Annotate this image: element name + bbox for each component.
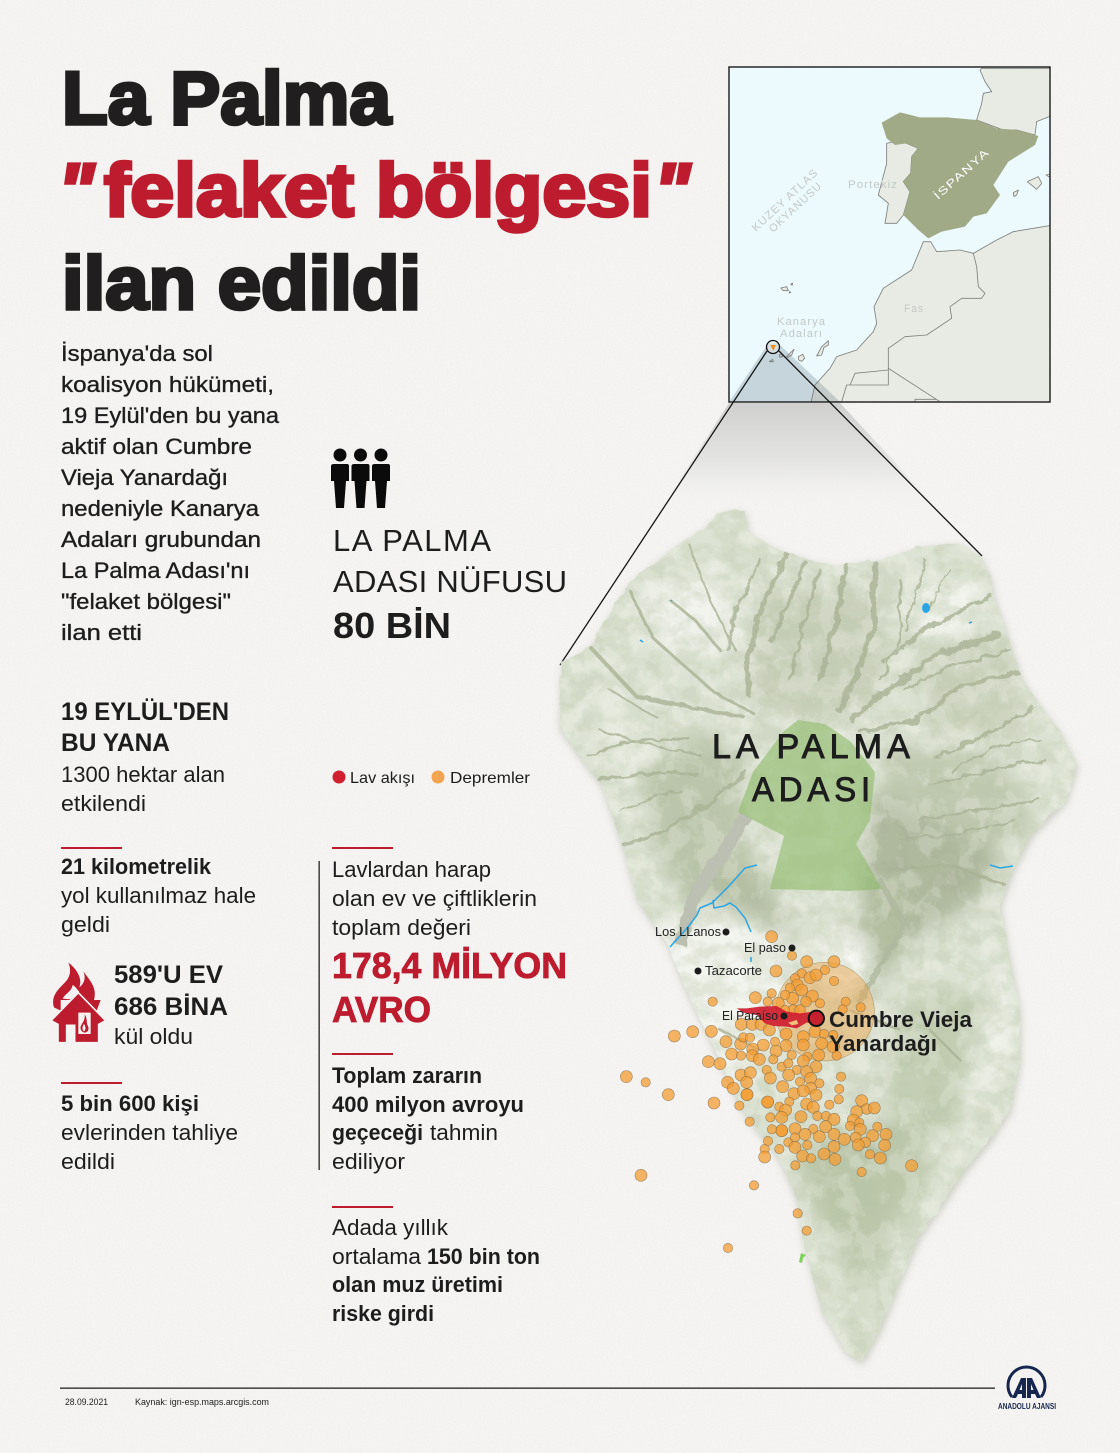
fact: banana: riske girdi <box>332 1301 434 1326</box>
fact: banana: 150 bin ton <box>427 1244 540 1269</box>
intro text: İspanya'da sol <box>61 341 213 366</box>
fact: affected area <box>61 697 229 816</box>
map place labels <box>655 924 796 1023</box>
title: felaket bölgesi <box>104 148 652 232</box>
fact: affected area: BU YANA <box>61 729 170 757</box>
fact: houses: 686 BİNA <box>114 993 228 1021</box>
intro text <box>61 341 280 645</box>
population text: LA PALMA <box>333 523 491 558</box>
map labels: Fas <box>904 303 924 315</box>
map place labels: El paso <box>744 940 786 955</box>
intro text: La Palma Adası'nı <box>61 558 250 583</box>
map labels: OKYANUSU <box>767 180 825 235</box>
intro text: "felaket bölgesi" <box>61 589 231 614</box>
fact: evacuated <box>61 1082 238 1174</box>
fact: roads: geldi <box>61 912 110 937</box>
population text: ADASI NÜFUSU <box>333 564 567 599</box>
damage column: AVRO <box>332 989 431 1030</box>
damage column: 400 milyon avroyu <box>332 1092 524 1117</box>
damage column <box>318 847 567 1174</box>
damage column: olan ev ve çiftliklerin <box>332 886 537 911</box>
map labels: İSPANYA <box>931 146 992 202</box>
logo: Anadolu Ajansi: ANADOLU AJANSI <box>998 1402 1056 1411</box>
intro text: Vieja Yanardağı <box>61 465 228 490</box>
intro text: Adaları grubundan <box>61 527 261 552</box>
map labels: Kanarya <box>777 316 826 328</box>
intro text: 19 Eylül'den bu yana <box>61 403 280 428</box>
ridges <box>588 545 1045 1060</box>
zoom funnel <box>560 351 982 665</box>
lava flow <box>737 1006 818 1028</box>
rivers and lakes <box>640 600 1013 962</box>
caldera <box>738 720 882 891</box>
barranco <box>680 815 746 945</box>
fact: banana: Adada yıllık <box>332 1215 449 1240</box>
marker: La Palma <box>766 340 780 354</box>
fact: banana: olan muz üretimi <box>332 1272 503 1297</box>
title: " <box>58 148 95 232</box>
intro text: ilan etti <box>61 620 142 645</box>
title: La Palma <box>62 56 392 140</box>
population text <box>333 523 567 646</box>
fact: affected area: etkilendi <box>61 791 146 816</box>
locator map <box>728 67 1053 407</box>
intro text: koalisyon hükümeti, <box>61 372 274 397</box>
title <box>58 56 691 325</box>
fact: banana <box>332 1206 540 1326</box>
island name: ADASI <box>752 771 875 809</box>
damage column: Lavlardan harap <box>332 857 491 882</box>
icon: burning house <box>51 963 106 1043</box>
legend <box>332 770 531 787</box>
map labels: Portekiz <box>848 179 898 191</box>
legend: Depremler <box>450 770 531 787</box>
footer: Kaynak: ign-esp.maps.arcgis.com <box>135 1397 269 1407</box>
map place labels: Tazacorte <box>705 963 762 978</box>
fact: roads <box>61 847 256 937</box>
map place labels: El Paraíso <box>722 1008 778 1023</box>
footer: 28.09.2021 <box>65 1397 108 1407</box>
earthquakes <box>620 931 918 1253</box>
damage column: 178,4 MİLYON <box>332 945 567 986</box>
fact: affected area: 19 EYLÜL'DEN <box>61 697 229 726</box>
title: " <box>654 148 691 232</box>
map: La Palma island <box>550 500 1090 1380</box>
green spot <box>799 1253 806 1263</box>
fact: affected area: 1300 hektar alan <box>61 762 225 787</box>
volcano label: Yanardağı <box>829 1031 937 1056</box>
fact: evacuated: evlerinden tahliye <box>61 1120 238 1145</box>
fact: houses <box>114 961 228 1049</box>
volcano label: Cumbre Vieja <box>829 1007 973 1032</box>
intro text: nedeniyle Kanarya <box>61 496 260 521</box>
island name <box>712 728 915 809</box>
title: ilan edildi <box>62 241 421 325</box>
fact: houses: kül oldu <box>114 1024 193 1049</box>
island name: LA PALMA <box>712 728 915 766</box>
legend: Lav akışı <box>350 770 415 787</box>
damage column: geçeceği <box>332 1120 423 1145</box>
damage column: Toplam zararın <box>332 1063 482 1088</box>
map place labels: Los LLanos <box>655 924 721 939</box>
intro text: aktif olan Cumbre <box>61 434 252 459</box>
crater <box>809 1011 824 1026</box>
fact: houses: 589'U EV <box>114 961 223 989</box>
damage column: toplam değeri <box>332 915 471 940</box>
fact: evacuated: edildi <box>61 1149 115 1174</box>
map labels <box>750 146 992 340</box>
map labels: Adaları <box>780 328 823 340</box>
fact: roads: yol kullanılmaz hale <box>61 883 256 908</box>
fact: banana: ortalama <box>332 1244 422 1269</box>
damage column: tahmin <box>430 1120 498 1145</box>
map labels: KUZEY ATLAS <box>750 167 821 234</box>
population text: 80 BİN <box>333 605 451 646</box>
population icon <box>331 448 390 508</box>
volcano label <box>829 1007 973 1056</box>
logo: Anadolu Ajansi <box>998 1367 1056 1411</box>
damage column: ediliyor <box>332 1149 405 1174</box>
fact: roads: 21 kilometrelik <box>61 854 212 879</box>
fact: evacuated: 5 bin 600 kişi <box>61 1091 199 1116</box>
footer <box>60 1388 995 1407</box>
